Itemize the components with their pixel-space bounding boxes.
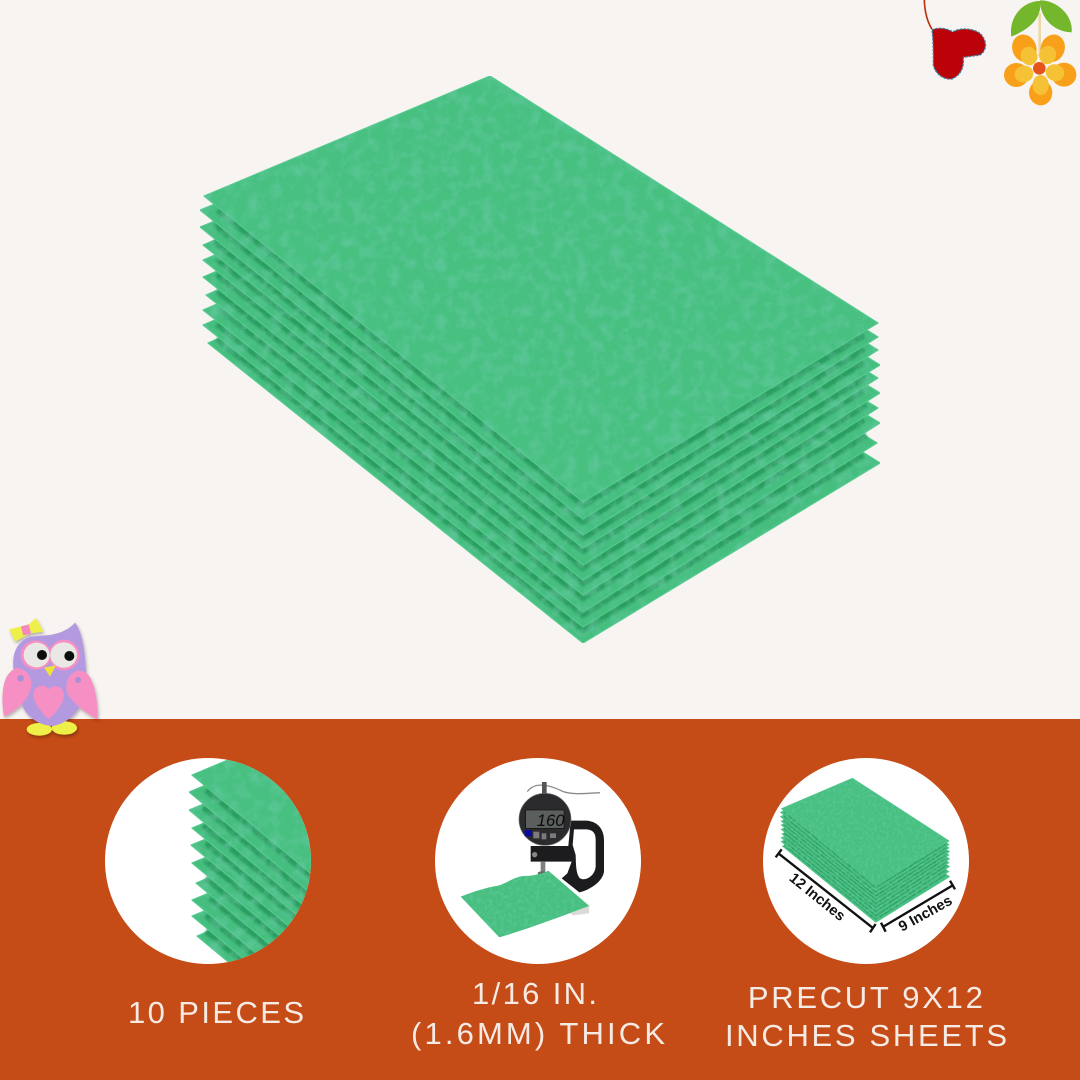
main product: stack of green felt sheets xyxy=(200,76,880,643)
icon: felt flower ornament xyxy=(1004,0,1076,105)
icon: felt heart ornament xyxy=(924,0,985,79)
panel: 10 pieces xyxy=(105,757,320,1038)
dimension labels xyxy=(786,870,955,935)
label: sheet size: PRECUT 9X12 xyxy=(748,980,983,1015)
dimension labels: 9 Inches xyxy=(896,893,955,935)
label: thickness: (1.6MM) THICK xyxy=(411,1016,665,1051)
dimension labels: 12 Inches xyxy=(786,870,848,925)
dimension lines xyxy=(776,849,955,932)
icon: digital thickness gauge xyxy=(519,782,604,892)
panel: thickness xyxy=(411,758,665,1051)
orange band xyxy=(0,719,1080,1080)
label: sheet size: INCHES SHEETS xyxy=(725,1018,1007,1053)
label: 10 pieces: 10 PIECES xyxy=(128,995,304,1030)
icon: felt owl xyxy=(2,618,98,736)
felt sheet under gauge xyxy=(461,871,589,937)
icon: digital thickness gauge: 160 xyxy=(537,811,565,830)
circle with stack and dimensions xyxy=(763,758,969,964)
circle with close-up of sheet edges xyxy=(105,758,311,964)
label: thickness: 1/16 IN. xyxy=(472,976,597,1011)
panel: sheet size xyxy=(725,758,1007,1053)
circle with thickness gauge and felt xyxy=(435,758,641,964)
